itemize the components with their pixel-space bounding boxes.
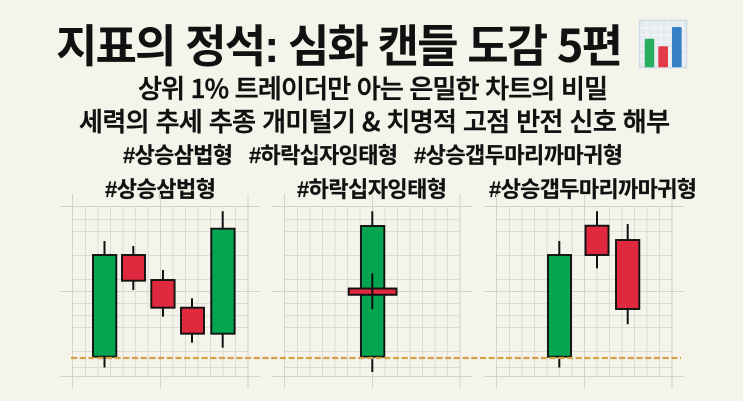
candle: green [548, 241, 571, 368]
heading: bearish harami cross: #하락십자잉태형 [297, 177, 447, 202]
subtitle line 2: 세력의 추세 추종 개미털기 & 치명적 고점 반전 신호 해부 [79, 102, 670, 139]
subtitle line 1: 상위 1% 트레이더만 아는 은밀한 차트의 비밀 [138, 69, 608, 106]
hashtag line: #하락십자잉태형 [249, 143, 398, 168]
title: 지표의 정석: 심화 캔들 도감 5편 [56, 10, 623, 75]
candle: green 1 [93, 241, 116, 368]
dashed support line [71, 357, 681, 359]
hashtag line: #상승삼법형 [123, 143, 233, 168]
icon: bar chart [640, 20, 686, 68]
candle: tall green [361, 211, 384, 372]
hashtag line [123, 143, 623, 168]
candle: red 4 [181, 298, 204, 343]
hashtag line: #상승갭두마리까마귀형 [414, 143, 623, 168]
candle: red 2 [122, 246, 145, 290]
heading: rising three methods: #상승삼법형 [105, 177, 216, 202]
panel: rising three methods [60, 177, 260, 388]
heading: upside gap two crows: #상승갭두마리까마귀형 [489, 177, 697, 202]
candle: red crow 2 [616, 224, 639, 324]
candle: red 3 [151, 270, 175, 317]
candle: green 5 [211, 211, 235, 348]
panel: upside gap two crows [484, 177, 697, 388]
candle: red cross [349, 273, 396, 309]
candle: red crow 1 [586, 211, 608, 268]
panel: bearish harami cross [272, 177, 472, 388]
